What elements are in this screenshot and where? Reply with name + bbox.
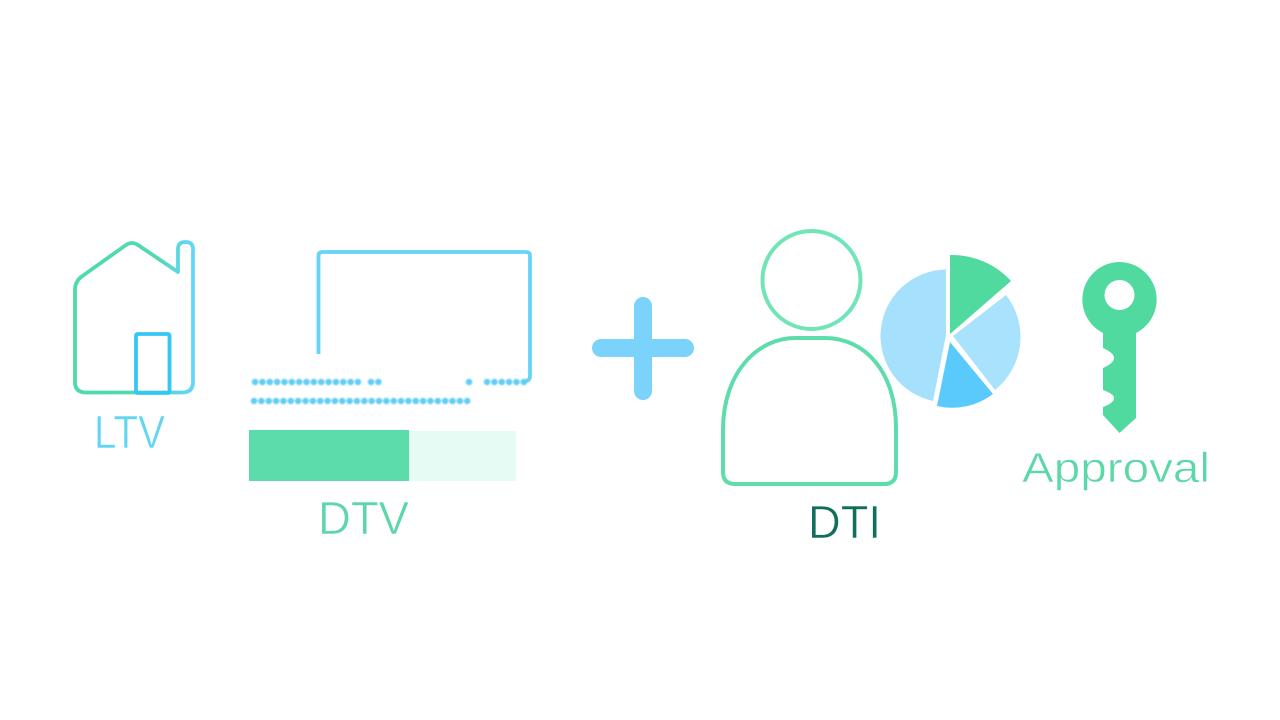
icon: key: [1082, 262, 1157, 433]
group: Approval: [1022, 262, 1210, 491]
icon: laptop base dotted lines: [254, 382, 524, 401]
icon: house outline: [75, 242, 193, 392]
progress bar: [249, 430, 516, 481]
group: DTI: [723, 231, 1020, 548]
icon: laptop screen outline: [318, 252, 530, 381]
pie slice: bright blue: [937, 342, 993, 408]
chart: pie chart: [881, 255, 1020, 408]
icon: house door: [136, 334, 170, 393]
group: LTV: [75, 242, 193, 458]
pie slice: large light blue: [881, 270, 946, 401]
label: LTV: LTV: [94, 406, 165, 458]
label: DTI: DTI: [808, 496, 881, 548]
label: DTV: DTV: [318, 492, 409, 544]
icon: person body: [723, 338, 896, 484]
icon: plus sign: [601, 306, 685, 391]
pie slice: right light blue: [953, 295, 1020, 390]
icon: person head: [762, 231, 860, 329]
group: DTV: [249, 252, 530, 544]
label: Approval: Approval: [1022, 444, 1210, 491]
pie slice: green: [950, 255, 1011, 334]
